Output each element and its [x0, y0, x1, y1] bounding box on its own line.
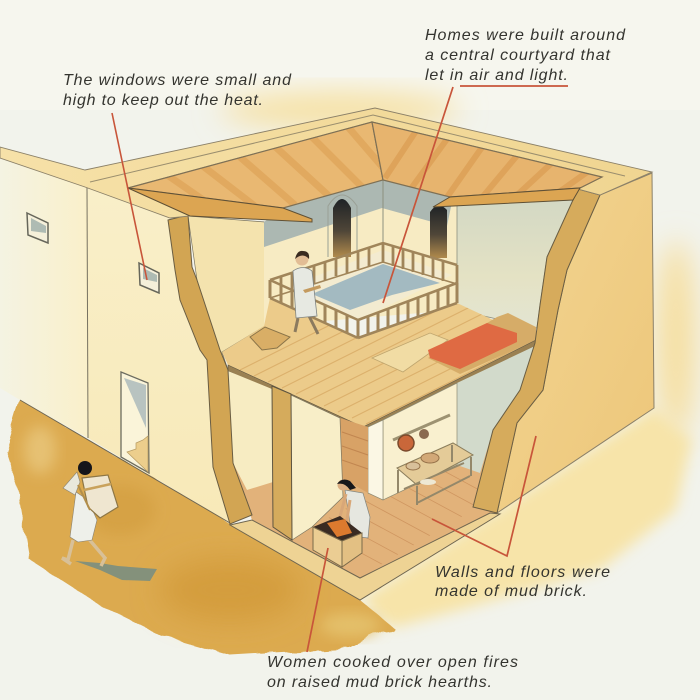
- annotation: windows: The windows were small and: [63, 72, 292, 89]
- upper room: rear wall: [264, 180, 457, 326]
- yard: pale ground right of house: [360, 408, 692, 628]
- ceiling: left: [128, 120, 385, 215]
- figure: woman at hearth: [337, 480, 370, 538]
- lower room: back wall: [383, 383, 457, 500]
- pot shelf: [393, 415, 473, 505]
- upper floor: [222, 298, 536, 427]
- annotation: walls and floors: made of mud brick.: [435, 583, 587, 600]
- rug on floor: [372, 333, 448, 372]
- lower room: brick floor lines: [329, 472, 478, 564]
- annotation: courtyard: a central courtyard that: [425, 47, 611, 64]
- annotation: windows: high to keep out the heat.: [63, 92, 263, 109]
- lower room: brick column: [340, 418, 368, 493]
- leader line: courtyard: [383, 86, 568, 303]
- lower room: centre panel: [291, 395, 343, 540]
- leader line: walls and floors: [432, 436, 536, 556]
- red bed: [428, 323, 517, 369]
- grey frieze: [264, 180, 453, 247]
- courtyard doors: [333, 199, 351, 257]
- base strip: wall thickness: [230, 513, 500, 600]
- annotation: walls and floors: Walls and floors were: [435, 564, 610, 581]
- courtyard back railing: [270, 243, 457, 298]
- lower room: white jamb: [368, 420, 383, 500]
- ceiling: right: [372, 122, 602, 200]
- lower room: grey wall: [457, 346, 535, 473]
- raised hearth: [313, 516, 362, 567]
- wall: far left: [0, 152, 88, 438]
- figure: man carrying bundle: [62, 461, 118, 566]
- leader line: windows: [112, 113, 147, 280]
- window: front wall: [139, 263, 159, 293]
- wall: right outer face: [497, 173, 654, 513]
- annotation: courtyard: Homes were built around: [425, 27, 626, 44]
- upper room: left wall: [188, 216, 265, 370]
- front railing: right side: [358, 283, 457, 338]
- wall: front left: [85, 187, 230, 523]
- window: left wall: [27, 213, 48, 243]
- wooden post: [272, 386, 292, 540]
- bed platform: [428, 313, 536, 374]
- beam: right overhang: [433, 188, 580, 207]
- upper floor edge: [228, 340, 536, 433]
- building: [0, 108, 654, 600]
- roof rim: [0, 108, 652, 218]
- courtyard floor and pool: [285, 250, 452, 320]
- lower room: left panel: [228, 371, 273, 490]
- leader line: hearths: [307, 548, 328, 652]
- wall section: left cut: [168, 215, 252, 524]
- ground: street: [5, 400, 393, 655]
- lower room: backing floor: [228, 343, 536, 578]
- annotation: windows: [63, 72, 292, 280]
- annotation: hearths: [267, 548, 518, 691]
- annotation: hearths: on raised mud brick hearths.: [267, 674, 492, 691]
- steps: [250, 327, 290, 350]
- annotation: courtyard: [383, 27, 626, 303]
- front railing: left side: [270, 280, 358, 338]
- annotation: courtyard: let in air and light.: [425, 67, 568, 84]
- figure shadow: [75, 561, 157, 581]
- wall section: right cut: [473, 189, 600, 513]
- figure: woman on upper floor: [293, 251, 321, 334]
- annotation: walls and floors: [432, 436, 610, 600]
- upper room: right wall: [457, 200, 573, 328]
- beam: left overhang: [128, 188, 312, 222]
- annotation: hearths: Women cooked over open fires: [267, 654, 518, 671]
- doorway with stairs: [121, 372, 149, 473]
